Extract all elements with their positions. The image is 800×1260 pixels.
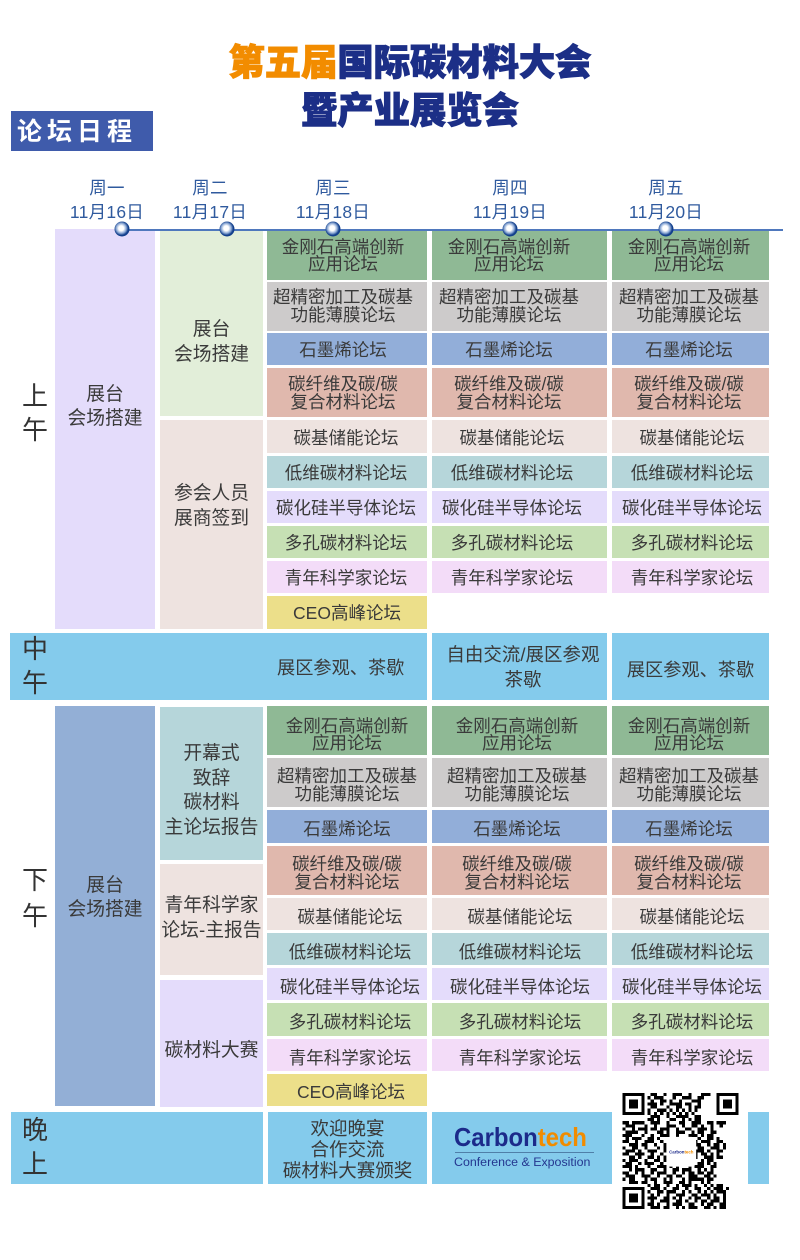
Tuesday morning block: registration: 参会人员: [174, 482, 249, 503]
side label: afternoon: 下: [22, 865, 48, 895]
Monday afternoon block: [55, 706, 155, 1106]
forum: precision machining: 超精密加工及碳基: [439, 287, 579, 307]
forum: precision machining: [612, 758, 769, 807]
forum: graphene: [267, 810, 427, 843]
forum: carbon fiber: [612, 846, 769, 895]
forum: porous carbon: [612, 1003, 769, 1036]
forum: young scientists: 青年科学家论坛: [631, 1048, 753, 1068]
forum: silicon carbide: 碳化硅半导体论坛: [442, 498, 582, 518]
forum: diamond: [612, 706, 769, 755]
forum: diamond: [612, 230, 769, 280]
Wednesday afternoon column: [267, 706, 427, 1106]
forum: porous carbon: [267, 1003, 427, 1036]
forum: diamond: [432, 706, 607, 755]
forum: precision machining: 超精密加工及碳基: [619, 287, 759, 307]
forum: precision machining: 功能薄膜论坛: [464, 784, 570, 804]
forum: carbon fiber: 复合材料论坛: [636, 392, 742, 412]
logo wordmark: Carbontech: [454, 1122, 587, 1152]
date: Thursday: 11月19日: [473, 202, 547, 222]
forum: carbon fiber: [432, 368, 607, 417]
forum: diamond: [267, 230, 427, 280]
side label: noon: 中: [22, 634, 48, 664]
forum: diamond: 金刚石高端创新: [456, 716, 578, 736]
forum: diamond: [267, 706, 427, 755]
date: Monday: 11月16日: [70, 202, 144, 222]
date: Tuesday: 周二: [192, 178, 228, 198]
forum: diamond: 应用论坛: [654, 733, 724, 753]
forum: graphene: [267, 333, 427, 365]
forum: low-dimensional carbon: 低维碳材料论坛: [451, 463, 573, 483]
side label: afternoon: [22, 865, 48, 931]
timeline axis: [120, 228, 783, 230]
Tuesday afternoon block: young scientist keynote: 论坛-主报告: [161, 918, 262, 940]
forum: low-dimensional carbon: [432, 933, 607, 965]
date: Friday: 周五: [648, 178, 684, 198]
forum: graphene: 石墨烯论坛: [473, 819, 561, 839]
forum: young scientists: [612, 1039, 769, 1071]
forum: young scientists: [267, 1039, 427, 1071]
evening band: banquet: 欢迎晚宴: [310, 1118, 384, 1138]
forum: precision machining: 超精密加工及碳基: [277, 766, 417, 786]
title: [228, 42, 592, 130]
forum: carbon fiber: [267, 846, 427, 895]
forum: graphene: 石墨烯论坛: [645, 819, 733, 839]
forum: silicon carbide: 碳化硅半导体论坛: [280, 977, 420, 997]
forum: silicon carbide: [432, 491, 607, 523]
forum: young scientists: 青年科学家论坛: [631, 568, 753, 588]
forum: precision machining: [612, 282, 769, 331]
forum: precision machining: 功能薄膜论坛: [636, 304, 742, 324]
Thursday morning column: [432, 231, 607, 593]
forum: young scientists: 青年科学家论坛: [285, 568, 407, 588]
side label: evening: 晚: [22, 1115, 48, 1145]
Tuesday afternoon block: opening: 致辞: [193, 766, 230, 788]
forum: carbon fiber: 碳纤维及碳/碳: [288, 374, 398, 394]
Tuesday morning block: registration: [160, 420, 263, 629]
forum: CEO summit: [267, 1074, 427, 1106]
forum: carbon fiber: 碳纤维及碳/碳: [454, 374, 564, 394]
Tuesday afternoon block: young scientist keynote: 青年科学家: [165, 894, 258, 915]
evening band: banquet: 碳材料大赛颁奖: [283, 1160, 412, 1180]
forum: precision machining: [267, 282, 427, 331]
forum: silicon carbide: [267, 968, 427, 1000]
forum: diamond: 应用论坛: [482, 733, 552, 753]
forum: carbon fiber: 复合材料论坛: [290, 392, 396, 412]
forum: carbon energy storage: 碳基储能论坛: [460, 428, 564, 448]
noon band: Friday: [612, 633, 769, 700]
forum: precision machining: [432, 282, 607, 331]
forum: carbon energy storage: 碳基储能论坛: [640, 907, 744, 927]
date: Monday: 周一: [89, 178, 125, 198]
forum: young scientists: [432, 1039, 607, 1071]
forum: low-dimensional carbon: [612, 933, 769, 965]
Friday morning column: [612, 231, 769, 593]
forum: precision machining: 超精密加工及碳基: [447, 766, 587, 786]
Tuesday afternoon block: opening: 开幕式: [183, 742, 240, 763]
Monday morning block: 会场搭建: [67, 407, 143, 428]
timeline dots: [114, 222, 674, 236]
date: Friday: 11月20日: [629, 202, 703, 222]
Tuesday afternoon block: competition: 碳材料大赛: [165, 1039, 258, 1060]
forum: porous carbon: [432, 526, 607, 558]
evening band: banquet: 合作交流: [310, 1138, 384, 1160]
title: 暨产业展览会: [301, 90, 519, 130]
forum: low-dimensional carbon: [267, 456, 427, 488]
Tuesday afternoon block: young scientist keynote: [160, 864, 263, 975]
forum: carbon energy storage: [612, 420, 769, 453]
side label: morning: 午: [22, 415, 48, 445]
forum: carbon fiber: [612, 368, 769, 417]
forum: carbon energy storage: [267, 420, 427, 453]
forum: carbon fiber: [267, 368, 427, 417]
Tuesday morning block: booth setup: [160, 230, 263, 416]
forum: carbon fiber: 碳纤维及碳/碳: [462, 854, 572, 874]
date: Thursday: 周四: [492, 178, 528, 198]
Tuesday morning block: booth setup: 展台: [193, 318, 230, 339]
side label: morning: [22, 381, 48, 445]
forum: diamond: 金刚石高端创新: [282, 236, 404, 256]
forum: diamond: 应用论坛: [474, 254, 544, 274]
forum: porous carbon: [612, 526, 769, 558]
forum: silicon carbide: [612, 491, 769, 523]
date: Tuesday: 11月17日: [173, 202, 247, 222]
forum: silicon carbide: [267, 491, 427, 523]
Monday morning block: [55, 229, 155, 629]
Monday morning block: 展台: [86, 382, 124, 404]
forum: silicon carbide: 碳化硅半导体论坛: [276, 498, 416, 518]
forum: young scientists: 青年科学家论坛: [459, 1048, 581, 1068]
forum: graphene: 石墨烯论坛: [465, 340, 553, 360]
forum: porous carbon: 多孔碳材料论坛: [285, 533, 407, 553]
forum: carbon energy storage: [432, 420, 607, 453]
forum: carbon energy storage: 碳基储能论坛: [294, 428, 398, 448]
QR code: Carbontech: [669, 1150, 694, 1155]
date: Friday: [629, 178, 703, 222]
side label: noon: 午: [22, 668, 48, 698]
forum: porous carbon: 多孔碳材料论坛: [631, 1012, 753, 1032]
side label: afternoon: 午: [22, 901, 48, 931]
forum: precision machining: 功能薄膜论坛: [290, 304, 396, 324]
forum: diamond: 金刚石高端创新: [286, 716, 408, 736]
noon band: Thursday: 自由交流/展区参观: [446, 644, 600, 664]
Monday afternoon block: 会场搭建: [67, 898, 143, 919]
evening band: right sliver: [748, 1112, 769, 1184]
forum: precision machining: 功能薄膜论坛: [294, 784, 400, 804]
date: Thursday: [473, 178, 547, 222]
forum: porous carbon: 多孔碳材料论坛: [459, 1012, 581, 1032]
forum: porous carbon: 多孔碳材料论坛: [451, 533, 573, 553]
evening band: left: [11, 1112, 263, 1184]
forum: silicon carbide: 碳化硅半导体论坛: [622, 498, 762, 518]
side label: noon: [22, 634, 48, 698]
side label: morning: 上: [22, 381, 48, 411]
forum: low-dimensional carbon: 低维碳材料论坛: [631, 942, 753, 962]
forum: porous carbon: 多孔碳材料论坛: [631, 533, 753, 553]
forum: silicon carbide: [612, 968, 769, 1000]
forum: diamond: 金刚石高端创新: [628, 236, 750, 256]
side label: evening: [22, 1115, 48, 1179]
forum: carbon energy storage: 碳基储能论坛: [640, 428, 744, 448]
forum: diamond: 应用论坛: [308, 254, 378, 274]
forum: CEO summit: CEO高峰论坛: [293, 603, 401, 623]
forum: diamond: 金刚石高端创新: [448, 236, 570, 256]
forum: precision machining: [267, 758, 427, 807]
forum: carbon fiber: [432, 846, 607, 895]
Friday afternoon column: [612, 706, 769, 1071]
forum: carbon fiber: 复合材料论坛: [464, 872, 570, 892]
forum: young scientists: 青年科学家论坛: [451, 568, 573, 588]
section tag: forum schedule: [11, 111, 153, 151]
forum: carbon fiber: 复合材料论坛: [636, 872, 742, 892]
QR code: [622, 1093, 738, 1209]
forum: CEO summit: CEO高峰论坛: [297, 1082, 405, 1102]
noon band: Thursday: 茶歇: [504, 668, 542, 690]
forum: diamond: 应用论坛: [654, 254, 724, 274]
forum: graphene: [432, 810, 607, 843]
forum: precision machining: 超精密加工及碳基: [619, 766, 759, 786]
Tuesday afternoon block: opening: 碳材料: [183, 791, 240, 812]
forum: low-dimensional carbon: 低维碳材料论坛: [459, 942, 581, 962]
Thursday afternoon column: [432, 706, 607, 1071]
forum: low-dimensional carbon: [267, 933, 427, 965]
forum: low-dimensional carbon: [432, 456, 607, 488]
forum: graphene: 石墨烯论坛: [645, 340, 733, 360]
Tuesday morning block: registration: 展商签到: [174, 506, 249, 528]
forum: carbon energy storage: [432, 898, 607, 930]
forum: low-dimensional carbon: [612, 456, 769, 488]
evening band: Carbontech logo: [432, 1112, 612, 1184]
Tuesday morning block: booth setup: 会场搭建: [174, 342, 249, 364]
forum: precision machining: 超精密加工及碳基: [273, 287, 413, 307]
forum: silicon carbide: 碳化硅半导体论坛: [450, 977, 590, 997]
Monday afternoon block: 展台: [86, 874, 124, 894]
forum: diamond: 金刚石高端创新: [628, 716, 750, 736]
forum: carbon fiber: 碳纤维及碳/碳: [292, 854, 402, 874]
forum: carbon fiber: 碳纤维及碳/碳: [634, 374, 744, 394]
date: Wednesday: 11月18日: [296, 202, 370, 222]
forum: low-dimensional carbon: 低维碳材料论坛: [285, 463, 407, 483]
forum: porous carbon: 多孔碳材料论坛: [289, 1012, 411, 1032]
forum: graphene: 石墨烯论坛: [303, 819, 391, 839]
Tuesday afternoon block: opening: 主论坛报告: [165, 816, 258, 836]
forum: young scientists: [432, 561, 607, 593]
forum: carbon energy storage: 碳基储能论坛: [468, 907, 572, 927]
forum: graphene: [432, 333, 607, 365]
date: Tuesday: [173, 178, 247, 222]
forum: carbon fiber: 复合材料论坛: [294, 872, 400, 892]
forum: porous carbon: [267, 526, 427, 558]
date: Monday: [70, 178, 144, 222]
forum: diamond: [432, 230, 607, 280]
forum: low-dimensional carbon: 低维碳材料论坛: [631, 463, 753, 483]
Tuesday afternoon block: competition: [160, 980, 263, 1107]
forum: young scientists: [612, 561, 769, 593]
forum: precision machining: 功能薄膜论坛: [636, 784, 742, 804]
logo subtitle: Conference & Exposition: [454, 1155, 590, 1169]
noon band: Friday: 展区参观、茶歇: [627, 660, 754, 680]
date: Wednesday: 周三: [315, 178, 351, 198]
date: Wednesday: [296, 178, 370, 222]
forum: precision machining: 功能薄膜论坛: [456, 304, 562, 324]
forum: young scientists: [267, 561, 427, 593]
forum: CEO summit: [267, 596, 427, 629]
forum: low-dimensional carbon: 低维碳材料论坛: [289, 942, 411, 962]
forum: carbon energy storage: [267, 898, 427, 930]
noon band: Mon to Wed: 展区参观、茶歇: [277, 658, 404, 678]
forum: precision machining: [432, 758, 607, 807]
forum: porous carbon: [432, 1003, 607, 1036]
forum: graphene: 石墨烯论坛: [299, 340, 387, 360]
forum: carbon fiber: 复合材料论坛: [456, 392, 562, 412]
forum: graphene: [612, 810, 769, 843]
Wednesday morning column: [267, 231, 427, 629]
forum: young scientists: 青年科学家论坛: [289, 1048, 411, 1068]
forum: graphene: [612, 333, 769, 365]
forum: carbon energy storage: [612, 898, 769, 930]
forum: silicon carbide: 碳化硅半导体论坛: [622, 977, 762, 997]
side label: evening: 上: [22, 1149, 48, 1179]
forum: diamond: 应用论坛: [312, 733, 382, 753]
forum: silicon carbide: [432, 968, 607, 1000]
forum: carbon fiber: 碳纤维及碳/碳: [634, 854, 744, 874]
noon band: Mon to Wed: [10, 633, 427, 700]
title: 第五届国际碳材料大会: [229, 42, 591, 82]
noon band: Thursday: [432, 633, 607, 700]
evening band: banquet: [268, 1112, 427, 1184]
section tag: forum schedule: 论坛日程: [17, 118, 137, 146]
logo rule: [455, 1152, 594, 1153]
forum: carbon energy storage: 碳基储能论坛: [298, 907, 402, 927]
Tuesday afternoon block: opening: [160, 707, 263, 860]
